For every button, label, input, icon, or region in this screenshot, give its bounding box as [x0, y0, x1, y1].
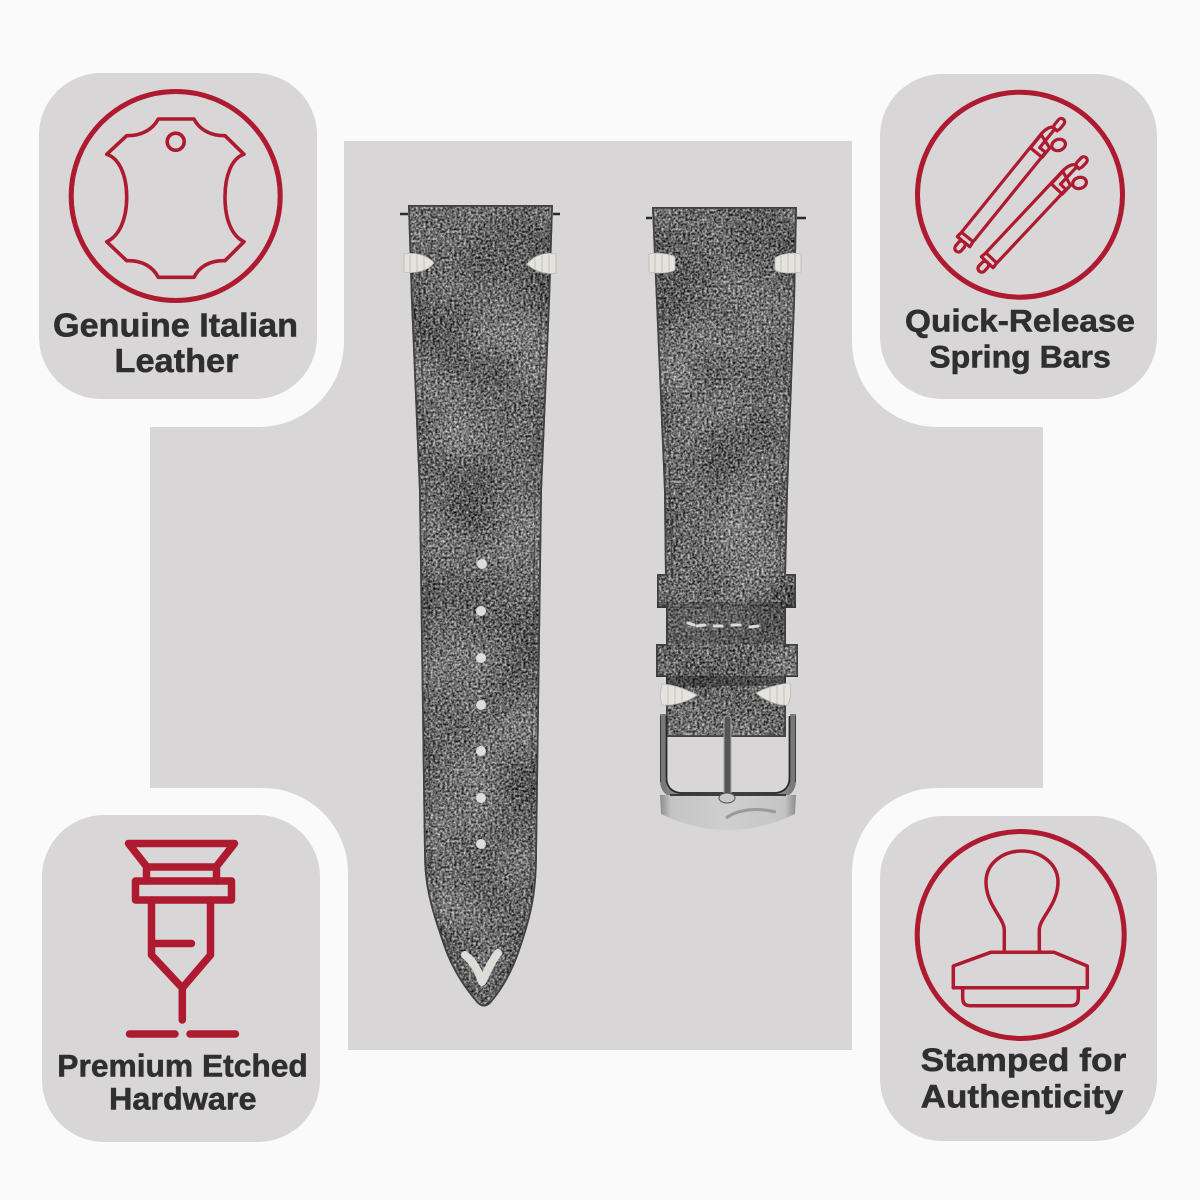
icon: leather hide in circle — [71, 92, 280, 300]
panel: premium etched hardware — [42, 815, 320, 1142]
icon: spring bars in circle — [918, 92, 1122, 297]
icon: etching laser head — [128, 844, 236, 1034]
label: genuine italian leather: Genuine Italian — [53, 306, 298, 344]
strap stitches near tip — [649, 253, 801, 705]
panel: quick-release spring bars — [880, 74, 1157, 399]
label: genuine italian leather: Leather — [114, 342, 239, 379]
long watch strap piece — [400, 200, 560, 1012]
strap stitches top — [404, 253, 556, 274]
central grey backdrop panel — [150, 141, 1043, 1050]
label: stamped for authenticity — [921, 1042, 1127, 1115]
label: premium etched hardware: Hardware — [109, 1080, 256, 1116]
label: premium etched hardware — [57, 1048, 308, 1116]
panel: stamped for authenticity — [880, 816, 1157, 1141]
label: quick-release spring bars: Quick-Release — [905, 303, 1135, 339]
label: genuine italian leather — [53, 306, 298, 379]
label: premium etched hardware: Premium Etched — [57, 1048, 308, 1084]
label: stamped for authenticity: Authenticity — [921, 1079, 1123, 1115]
label: quick-release spring bars: Spring Bars — [929, 339, 1111, 375]
panel: genuine italian leather — [39, 73, 317, 399]
short watch strap piece with buckle — [646, 200, 806, 830]
V stitch at strap tip — [465, 953, 498, 982]
keeper stitch dashes — [688, 623, 758, 627]
strap holes — [476, 559, 487, 849]
icon: rubber stamp in circle — [917, 832, 1124, 1038]
label: stamped for authenticity: Stamped for — [921, 1042, 1127, 1078]
label: quick-release spring bars — [905, 303, 1135, 375]
buckle — [660, 714, 796, 830]
